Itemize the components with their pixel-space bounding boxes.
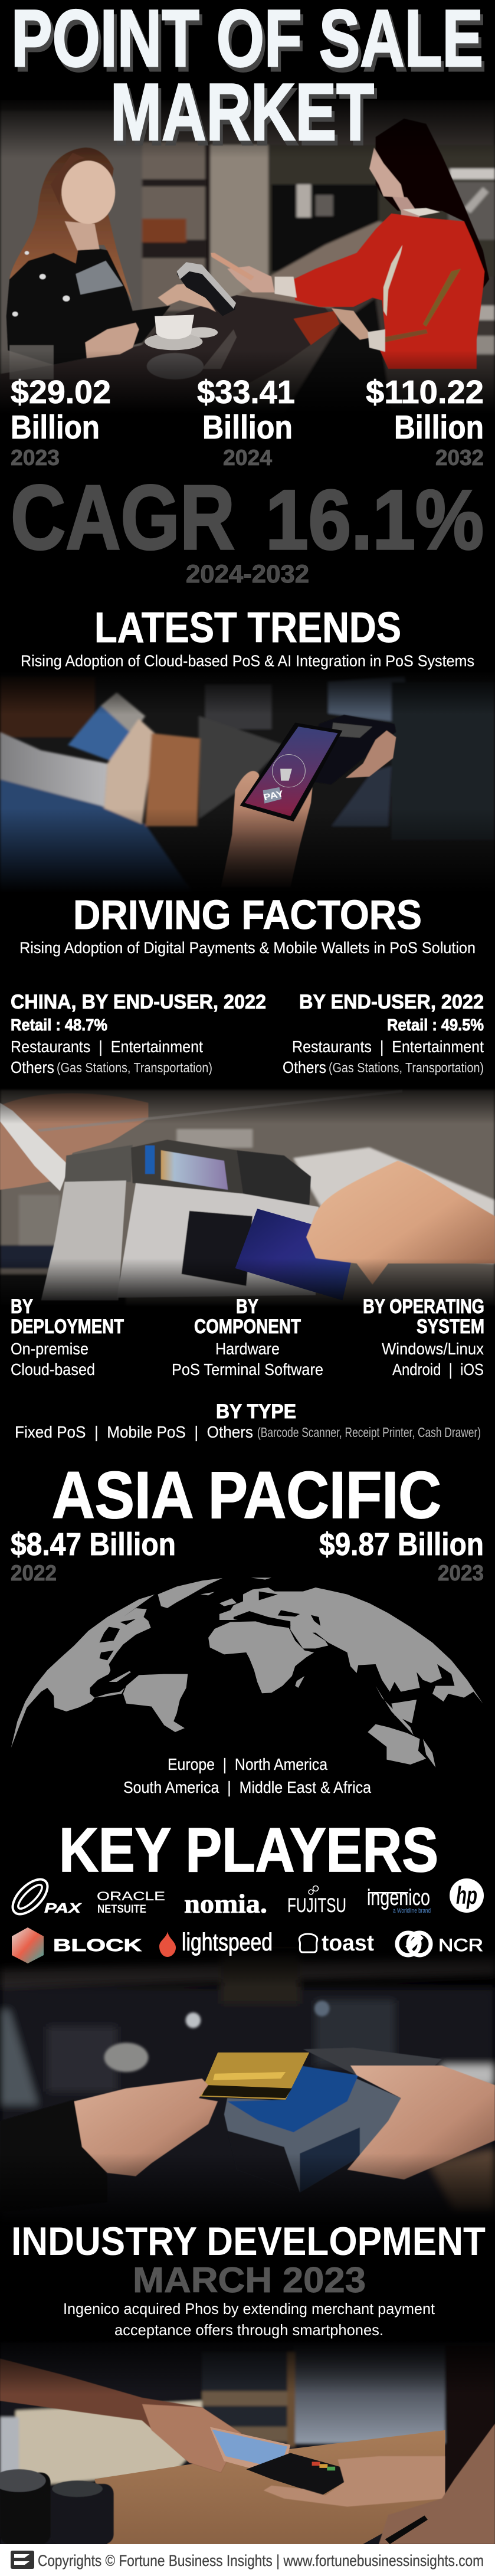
- date: March 2023: MARCH 2023: [133, 2260, 366, 2300]
- title text: MARKET: [110, 67, 374, 158]
- photo: card terminal with receipt: [0, 1079, 495, 1308]
- barista: [6, 148, 216, 365]
- Greenland: [158, 1578, 222, 1608]
- cafe background: [0, 92, 495, 413]
- payment terminal: [41, 1140, 319, 1301]
- stat: 2024 market size: [197, 374, 295, 470]
- fade to black: [0, 2153, 495, 2225]
- logo: HP: hp: [456, 1881, 477, 1909]
- shopper with bag: [0, 692, 201, 892]
- Africa: [208, 1621, 314, 1693]
- backdrop: [0, 671, 495, 892]
- stat: 2032 market size: 2032: [435, 446, 484, 470]
- fade to black: [0, 2332, 495, 2394]
- logo: NCR: [397, 1933, 483, 1955]
- logo: Oracle NetSuite: ORACLE: [97, 1890, 165, 1903]
- hand holding phone: [221, 771, 313, 888]
- other regions list: Europe | North America: [168, 1755, 327, 1773]
- stat: 2032 market size: Billion: [394, 408, 484, 446]
- North America: [11, 1595, 155, 1748]
- bank card: [235, 1209, 357, 1301]
- logo: Lightspeed: [159, 1928, 273, 1957]
- segment: by deployment: [11, 1295, 124, 1379]
- stat: 2023 market size: 2023: [11, 446, 60, 470]
- counter top: [0, 295, 339, 413]
- stat: Asia Pacific 2022: $8.47 Billion: [11, 1527, 176, 1562]
- logo: Toast: [299, 1931, 374, 1956]
- end-user breakdown: China: CHINA, BY END-USER, 2022: [11, 991, 266, 1013]
- gold card: [199, 2053, 309, 2100]
- South America: [123, 1674, 188, 1732]
- title shadow: [14, 0, 486, 162]
- end-user breakdown: global: Others: [283, 1058, 326, 1076]
- Australia: [368, 1724, 426, 1765]
- heading: Asia Pacific: ASIA PACIFIC: [52, 1458, 441, 1532]
- segment: by operating system: Windows/Linux: [382, 1340, 484, 1358]
- islands: [295, 1676, 304, 1688]
- logo: Oracle NetSuite: NETSUITE: [97, 1903, 146, 1916]
- photo fades: [0, 1079, 495, 1308]
- blurred backdrop: [0, 1952, 495, 2222]
- segment: by deployment: On-premise: [11, 1340, 88, 1358]
- backdrop: [0, 2342, 495, 2545]
- segment: by type: [15, 1400, 481, 1441]
- stat: 2024 market size: Billion: [202, 408, 293, 446]
- title shadow: MARKET: [113, 72, 377, 162]
- heading: latest trends: LATEST TRENDS: [94, 604, 401, 652]
- coffee cup: [9, 315, 218, 379]
- world globe: [11, 1577, 483, 1767]
- wooden table: [94, 2430, 445, 2544]
- photo: phone tap payment: [0, 670, 495, 897]
- terminal and hand: [313, 715, 396, 784]
- logo: Toast: toast: [322, 1931, 374, 1956]
- logo: Block: [12, 1927, 142, 1963]
- segment: by deployment: Cloud-based: [11, 1360, 95, 1379]
- end-user breakdown: China: Restaurants | Entertainment: [11, 1037, 203, 1056]
- end-user breakdown: China: Others: [11, 1058, 54, 1076]
- CAGR headline: CAGR: [11, 466, 235, 568]
- logo: HP: [450, 1878, 484, 1913]
- receiving hand: [264, 2456, 445, 2507]
- right hand: [347, 2066, 495, 2179]
- customer in red jacket: [211, 119, 489, 369]
- logo: Ingenico: a Worldline brand: [393, 1907, 431, 1914]
- logo: NCR: NCR: [438, 1936, 483, 1955]
- footer bar: [0, 2544, 495, 2576]
- end-user breakdown: global: [283, 991, 484, 1076]
- heading: driving factors: [19, 892, 476, 957]
- blue terminal: [224, 2048, 442, 2192]
- segment: by component: BY: [236, 1295, 258, 1318]
- CAGR headline: [11, 466, 484, 568]
- top and bottom fades: [0, 0, 495, 423]
- segment: by type: BY TYPE: [216, 1400, 296, 1423]
- other regions list: [123, 1755, 371, 1796]
- logo: Ingenico: ingenico: [367, 1886, 430, 1910]
- left hand and sleeve: [0, 2079, 218, 2212]
- segment: by component: [172, 1295, 323, 1379]
- smartphone: PAY: [262, 788, 285, 803]
- title: [11, 0, 486, 162]
- logo: Fujitsu: FUJITSU: [287, 1894, 346, 1917]
- title text: [11, 0, 483, 158]
- right forearm and pen: [379, 2424, 495, 2544]
- segment: by type: Fixed PoS | Mobile PoS | Others: [15, 1423, 253, 1441]
- logo: Ingenico: [367, 1886, 431, 1914]
- logo: Oracle NetSuite: [97, 1890, 165, 1916]
- segment: by deployment: DEPLOYMENT: [11, 1315, 124, 1338]
- other regions list: South America | Middle East & Africa: [123, 1778, 371, 1796]
- driving factors subtitle: Rising Adoption of Digital Payments & Mobile Wallets in PoS Solution: [19, 939, 476, 957]
- card reader: [246, 2453, 349, 2495]
- stat: 2032 market size: $110.22: [366, 374, 484, 410]
- photo: phone on card reader: [0, 2332, 495, 2545]
- heading: key players: KEY PLAYERS: [59, 1815, 438, 1885]
- segment: by deployment: BY: [11, 1295, 33, 1318]
- logo: PAX: PAX: [44, 1900, 82, 1916]
- stat: Asia Pacific 2023: [319, 1527, 484, 1585]
- segment: by operating system: [363, 1295, 484, 1379]
- end-user breakdown: global: Retail : 49.5%: [387, 1016, 484, 1034]
- logo: PAX: [6, 1873, 82, 1920]
- blurred backdrop: [0, 1089, 495, 1305]
- photo fades: [0, 670, 495, 897]
- heading: driving factors: DRIVING FACTORS: [73, 892, 422, 938]
- stat: 2023 market size: $29.02: [11, 374, 111, 410]
- heading: latest trends: [21, 604, 474, 670]
- logo: Block: BLOCK: [53, 1936, 142, 1955]
- stat: Asia Pacific 2022: [11, 1527, 176, 1585]
- logo: Lightspeed: lightspeed: [182, 1928, 273, 1956]
- stat: Asia Pacific 2022: 2022: [11, 1561, 57, 1585]
- Eurasia: [219, 1588, 483, 1704]
- paying arm: [0, 2359, 241, 2473]
- stat: 2024 market size: $33.41: [197, 374, 295, 410]
- development description: Ingenico acquired Phos by extending merchant payment: [63, 2300, 435, 2318]
- hand with receipt: [0, 1089, 402, 1191]
- development description: [63, 2300, 435, 2339]
- stat: 2023 market size: Billion: [11, 408, 100, 446]
- segment: by component: COMPONENT: [194, 1315, 301, 1338]
- bokeh lights: [104, 2001, 330, 2072]
- photo: card handed to terminal: [0, 1948, 495, 2225]
- stat: 2023 market size: [11, 374, 111, 470]
- footer logo: [11, 2551, 34, 2569]
- end-user breakdown: China: Retail : 48.7%: [11, 1016, 107, 1034]
- logos row 1: [6, 1873, 484, 1920]
- stat: Asia Pacific 2023: 2023: [438, 1561, 484, 1585]
- segment: by component: PoS Terminal Software: [172, 1360, 323, 1379]
- end-user breakdown: China: (Gas Stations, Transportation): [57, 1060, 212, 1075]
- smartphone: [240, 723, 342, 821]
- end-user breakdown: China: [11, 991, 266, 1076]
- black cups: [0, 2469, 114, 2544]
- development description: acceptance offers through smartphones.: [114, 2321, 383, 2339]
- segment: by component: Hardware: [215, 1340, 280, 1358]
- stat: 2024 market size: 2024: [223, 446, 272, 470]
- hero photo: customer paying barista at a counter: [0, 0, 495, 423]
- hand holding card: [306, 1161, 495, 1285]
- logo: Fujitsu: [287, 1886, 346, 1917]
- logo: nomia: nomia.: [184, 1888, 267, 1919]
- phone: [210, 2427, 290, 2473]
- CAGR period: 2024-2032: [186, 560, 309, 588]
- logos row 2: [12, 1927, 483, 1963]
- stat: 2032 market size: [366, 374, 484, 470]
- latest trends subtitle: Rising Adoption of Cloud-based PoS & AI Integration in PoS Systems: [21, 652, 474, 670]
- end-user breakdown: global: BY END-USER, 2022: [299, 991, 484, 1013]
- card terminal: [177, 262, 236, 316]
